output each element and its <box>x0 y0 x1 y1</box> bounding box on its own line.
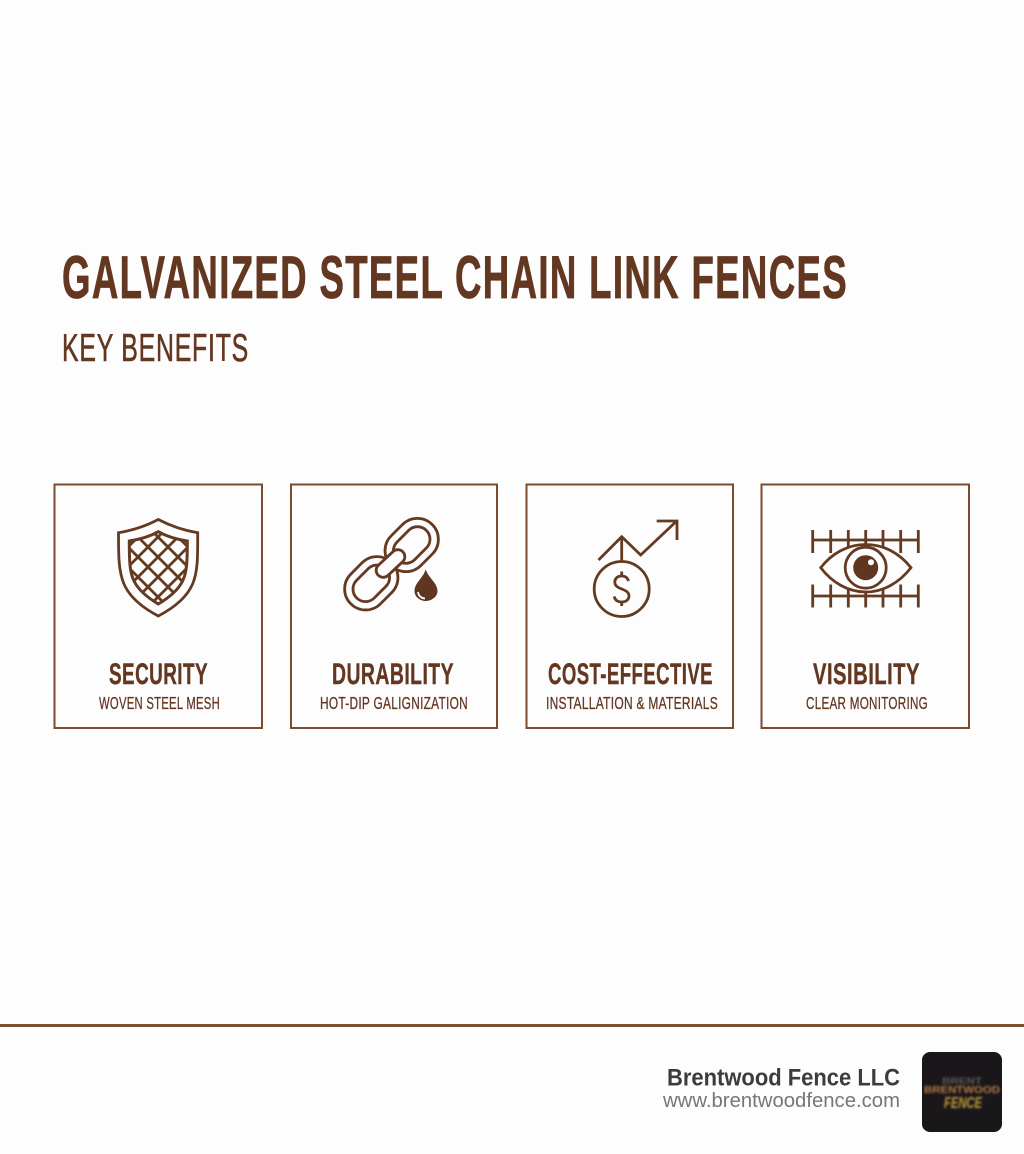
logo: BRENT <box>942 1076 983 1086</box>
heading: cost-effective: COST-EFFECTIVE <box>548 658 713 691</box>
logo: FENCE <box>944 1095 983 1112</box>
caption: cost-effective: INSTALLATION & MATERIALS <box>546 693 718 713</box>
heading: security: SECURITY <box>109 658 208 691</box>
footer brand name: Brentwood Fence LLC <box>667 1064 900 1092</box>
icon: shield with mesh <box>117 518 200 618</box>
logo <box>922 1052 1002 1132</box>
caption: security: WOVEN STEEL MESH <box>99 693 220 713</box>
icon: eye behind fence <box>813 530 918 608</box>
heading: durability: DURABILITY <box>332 658 454 691</box>
subtitle: KEY BENEFITS <box>62 327 249 370</box>
panel: security <box>54 459 262 728</box>
caption: durability: HOT-DIP GALIGNIZATION <box>320 693 468 713</box>
icon: dollar coin with rising arrow <box>594 521 677 616</box>
footer website: www.brentwoodfence.com <box>662 1090 900 1112</box>
heading: visibility: VISIBILITY <box>813 658 920 691</box>
panel: visibility <box>762 484 969 728</box>
footer rule <box>0 1024 1024 1027</box>
icon: chain links with drop <box>336 510 447 619</box>
caption: visibility: CLEAR MONITORING <box>806 693 928 713</box>
panel: cost-effective <box>526 484 733 728</box>
logo: BRENTWOOD <box>924 1085 1000 1096</box>
panel: durability <box>291 484 497 728</box>
